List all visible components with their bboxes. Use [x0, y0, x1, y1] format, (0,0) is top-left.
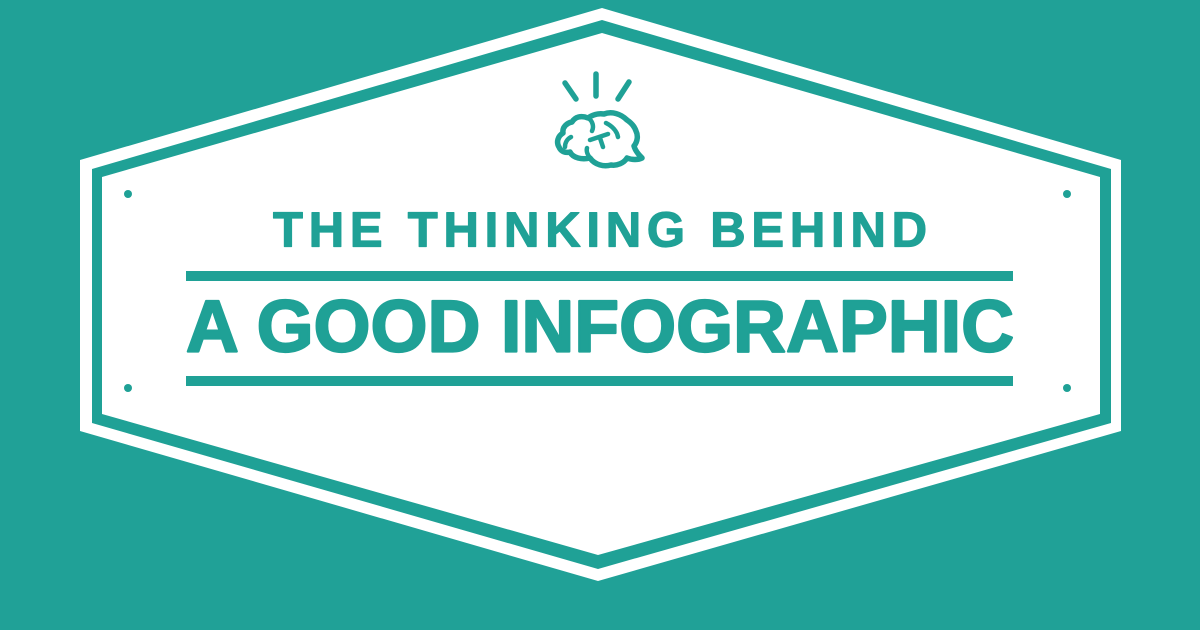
badge: inner white panel: [102, 33, 1100, 555]
heading line 2: A GOOD INFOGRAPHIC: [186, 286, 1014, 368]
heading line 1: THE THINKING BEHIND: [273, 204, 927, 258]
top rule: [186, 271, 1013, 281]
bottom rule: [186, 376, 1013, 386]
badge: outer white hexagon: [80, 8, 1121, 581]
badge: teal ring: [92, 20, 1111, 569]
icon: brain with idea rays: [558, 74, 642, 166]
rivets: [124, 190, 1071, 392]
